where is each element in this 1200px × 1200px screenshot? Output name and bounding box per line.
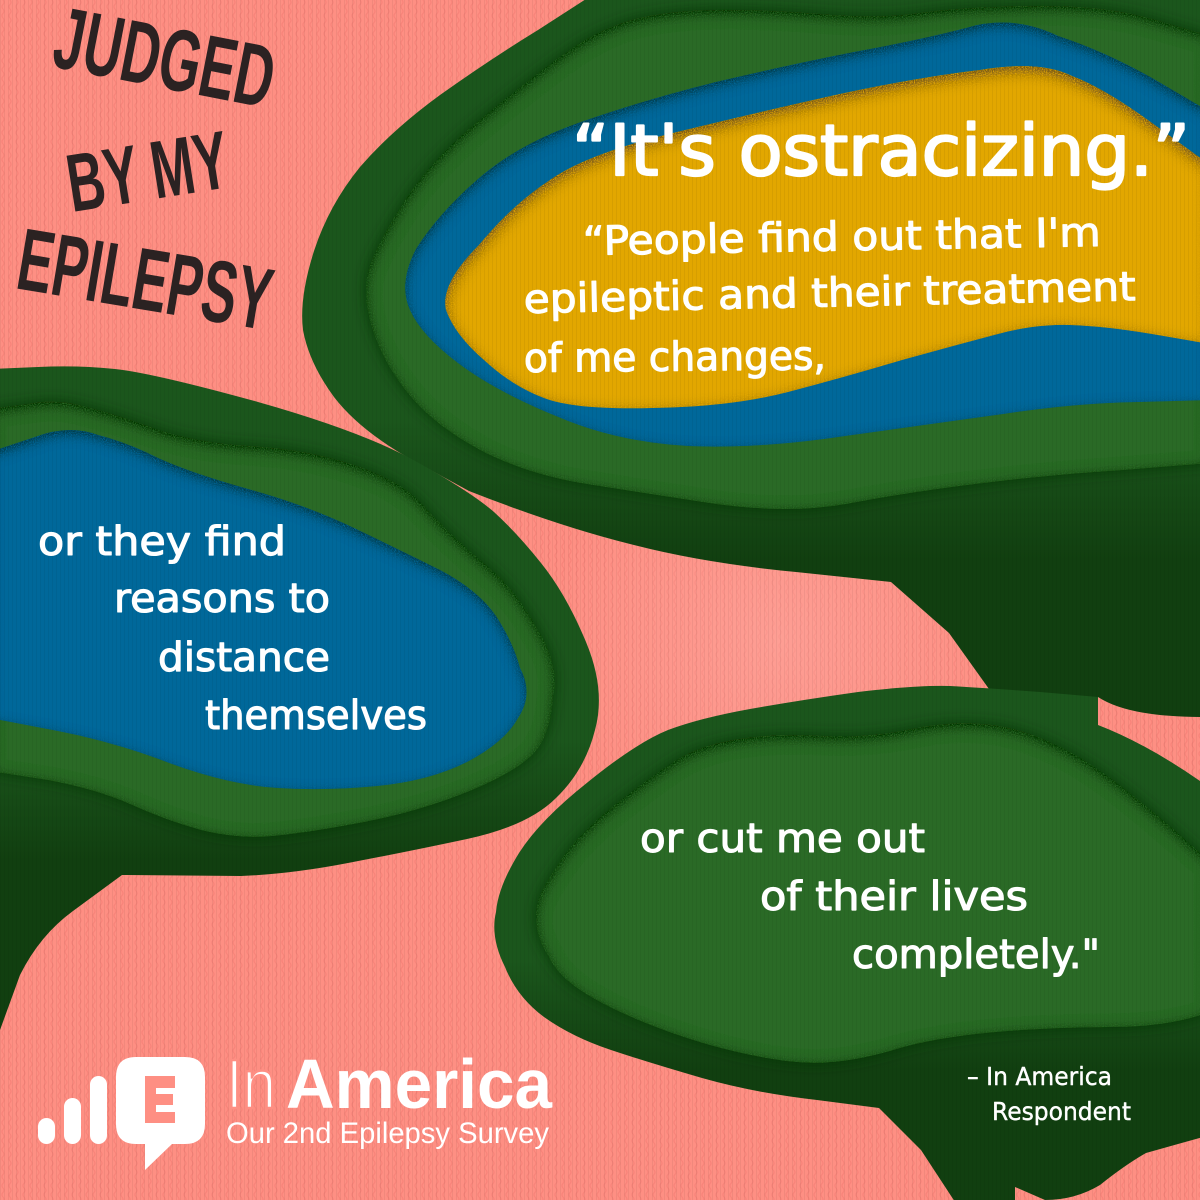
attribution: – In America bbox=[967, 1062, 1112, 1091]
quote text: top brain: epileptic and their treatment bbox=[523, 264, 1136, 323]
quote text: left brain: distance bbox=[158, 635, 330, 681]
title: Judged by my epilepsy bbox=[11, 0, 283, 349]
panel: left brain bbox=[0, 366, 599, 1030]
quote text: lower brain bbox=[640, 816, 1100, 978]
logo: In America bbox=[38, 1045, 553, 1170]
quote text: lower brain: or cut me out bbox=[640, 816, 925, 862]
quote text: top brain: “People find out that I'm bbox=[582, 210, 1101, 265]
title line: By my: BY MY bbox=[61, 115, 235, 230]
quote text: lower brain: completely." bbox=[852, 932, 1100, 978]
left brain outer layer bbox=[0, 366, 599, 1030]
quote text: left brain bbox=[38, 519, 427, 739]
icon: speech bubble with E bbox=[116, 1057, 205, 1170]
top brain yellow layer bbox=[445, 66, 1200, 408]
attribution bbox=[967, 1062, 1131, 1126]
logo wordmark: America: America bbox=[286, 1045, 553, 1123]
quote heading: “It's ostracizing.” bbox=[572, 110, 1190, 192]
quote text: left brain: themselves bbox=[205, 693, 427, 739]
quote text: lower brain: of their lives bbox=[760, 874, 1028, 920]
left brain blue layer bbox=[0, 430, 527, 789]
attribution: Respondent bbox=[992, 1097, 1131, 1126]
quote text: left brain: or they find bbox=[38, 519, 286, 565]
panel: lower brain bbox=[494, 686, 1200, 1200]
lower brain outer layer bbox=[494, 686, 1200, 1200]
top brain outer layer bbox=[302, 0, 1200, 740]
logo wordmark: In: In bbox=[226, 1045, 276, 1123]
quote text: left brain: reasons to bbox=[114, 576, 330, 622]
top brain green layer bbox=[366, 6, 1200, 509]
lower brain green layer bbox=[536, 723, 1200, 1063]
top brain blue layer bbox=[405, 23, 1200, 447]
panel: top brain bbox=[302, 0, 1200, 740]
title line: Epilepsy: EPILEPSY bbox=[11, 209, 280, 349]
left brain green layer bbox=[0, 402, 555, 837]
quote text: top brain: of me changes, bbox=[524, 333, 826, 382]
quote text: top brain bbox=[523, 210, 1136, 382]
icon: signal bars bbox=[38, 1076, 107, 1144]
logo subtitle: Our 2nd Epilepsy Survey bbox=[226, 1117, 549, 1150]
